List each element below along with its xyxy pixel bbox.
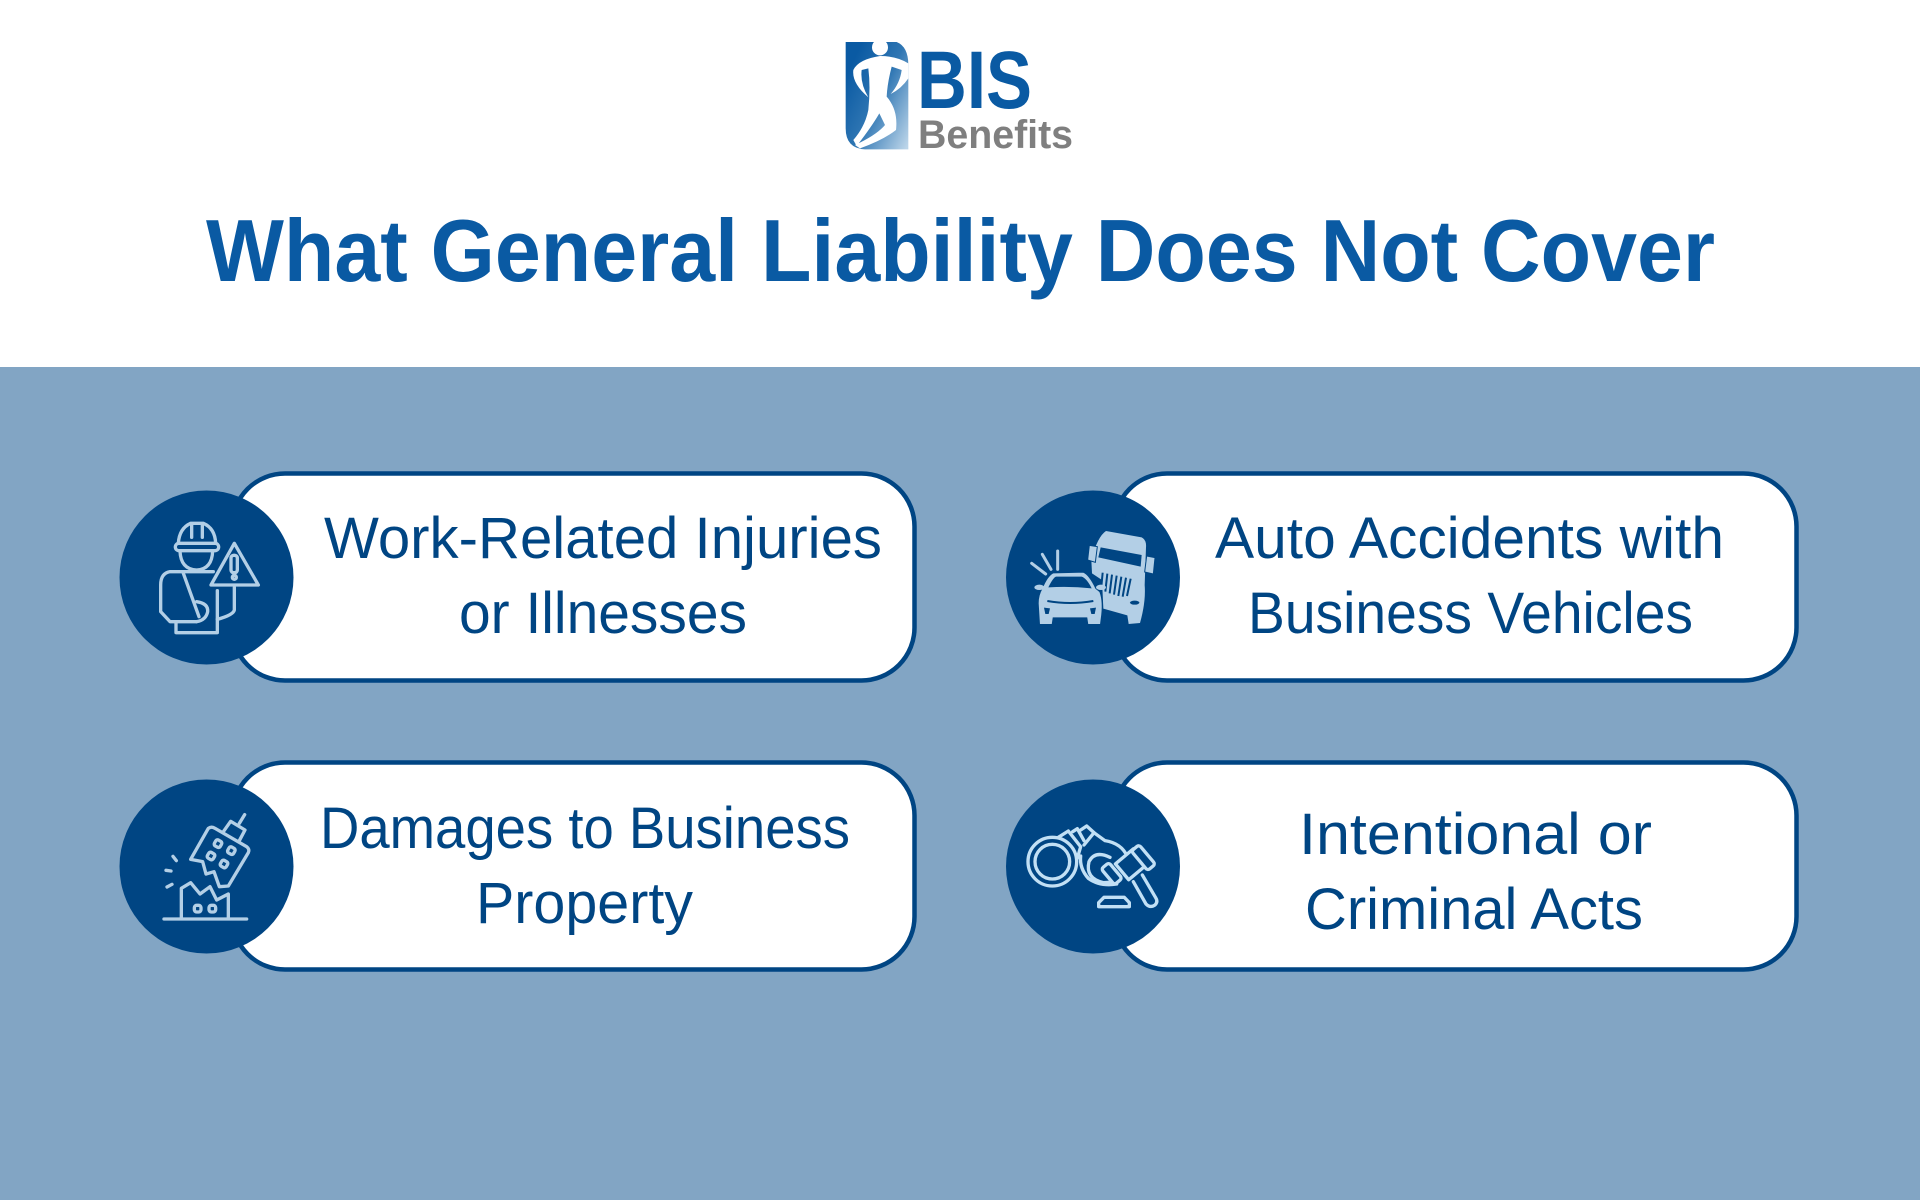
card text [1215,506,1724,646]
card text: Business Vehicles [1248,581,1693,646]
icon: car and truck collision [1032,531,1155,625]
card outline [232,474,914,680]
card outline [1114,474,1796,680]
truck [1088,531,1155,624]
icon: injured worker with warning sign [161,523,258,633]
title: What General Liability Does Not Cover [206,201,1715,300]
card: intentional or criminal acts [1006,762,1796,970]
logo mark: runner [846,39,908,149]
card: work-related injuries [120,474,914,680]
icon: collapsing building [164,815,249,919]
card text: Intentional or [1299,802,1652,867]
card text [320,796,850,936]
icon circle [1006,490,1180,664]
card: damages to business property [120,762,914,970]
card text: Property [476,871,693,936]
icon circle [120,780,294,954]
card text: Work-Related Injuries [324,506,882,571]
impact rays [1032,551,1058,574]
card text [324,506,882,646]
icon circle [120,490,294,664]
card text: Auto Accidents with [1215,506,1724,571]
card outline [232,762,914,970]
panel: blue background band [0,367,1920,1200]
card text: or Illnesses [459,581,747,646]
car [1034,572,1106,625]
icon: handcuffs and gavel [1028,826,1157,907]
card text: Criminal Acts [1305,877,1643,942]
card text [1299,802,1652,942]
icon circle [1006,780,1180,954]
logo wordmark: BIS: BIS [917,35,1032,126]
logo [846,35,1073,157]
card: auto accidents [1006,474,1796,680]
card text: Damages to Business [320,796,850,861]
card outline [1114,762,1796,970]
logo wordmark: Benefits: Benefits [918,113,1073,157]
